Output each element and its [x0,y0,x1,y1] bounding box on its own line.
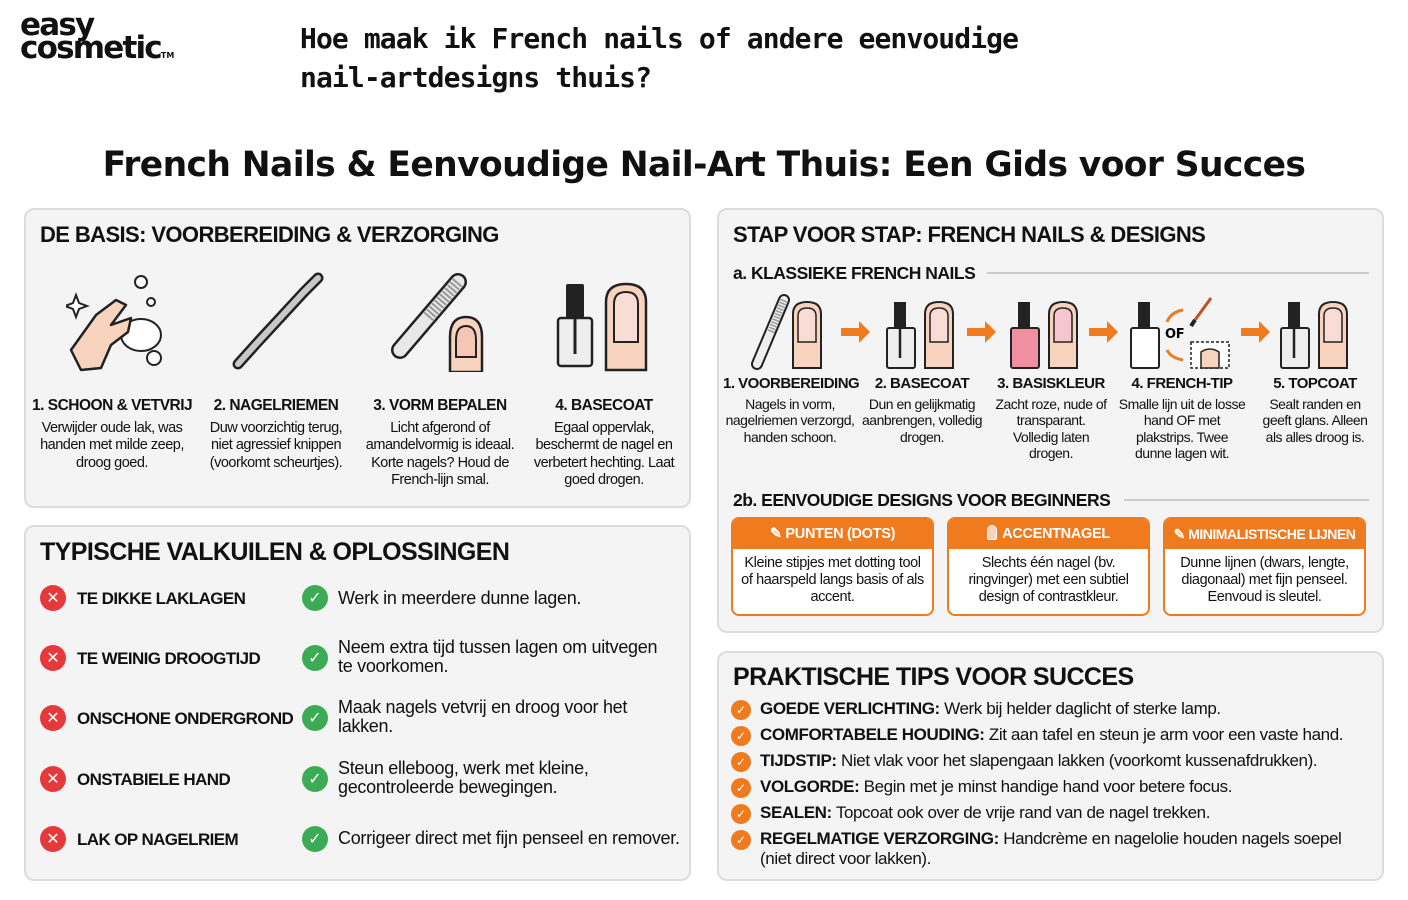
tips list: VOLGORDE: Begin met je minst handige hand voor betere focus. [760,777,1232,796]
french step 1: 1. VOORBEREIDING [723,375,859,392]
step 3: Licht afgerond of amandelvormig is ideaal. Korte nagels? Houd de French-lijn smal. [366,420,514,488]
tip 5 [731,803,1210,824]
pitfall 1: Werk in meerdere dunne lagen. [338,588,581,608]
step 4: 4. BASECOAT [555,397,653,414]
tips list [731,699,1343,868]
tip 4 [731,777,1232,798]
heading: tips: PRAKTISCHE TIPS VOOR SUCCES [733,663,1134,691]
question heading: Hoe maak ik French nails of andere eenvoudige [300,22,1018,55]
pitfall 2: TE WEINIG DROOGTIJD [77,649,260,668]
pitfall 4: Steun elleboog, werk met kleine, [338,758,589,778]
tip 6 [731,829,1341,868]
tips list: COMFORTABELE HOUDING: Zit aan tafel en steun je arm voor een vaste hand. [760,725,1343,744]
main title: French Nails & Eenvoudige Nail-Art Thuis: Een Gids voor Succes [103,145,1305,185]
pitfall 2: ✕ [46,648,60,667]
pitfall 1: ✓ [308,588,322,607]
pitfall 2: te voorkomen. [338,656,448,676]
step 3: 3. VORM BEPALEN [373,397,507,414]
tip 3 [731,751,1317,772]
french step 2: 2. BASECOAT [875,375,969,392]
pitfall 3: ONSCHONE ONDERGROND [77,709,293,728]
pitfall 3: ✕ [46,708,60,727]
french step 1: Nagels in vorm, nagelriemen verzorgd, handen schoon. [726,396,854,444]
panel: stap voor stap [717,208,1384,633]
french step 1 [723,375,859,444]
question heading: nail-artdesigns thuis? [300,61,651,94]
french step 2: Dun en gelijkmatig aanbrengen, volledig drogen. [862,396,982,444]
logo [20,7,174,66]
tip 2 [731,725,1343,746]
french step 5: Sealt randen en geeft glans. Alleen als alles droog is. [1263,396,1367,444]
pitfall 2: ✓ [308,648,322,667]
card: lijnen: ✎ MINIMALISTISCHE LIJNEN [1174,526,1355,542]
card: dots: Kleine stipjes met dotting tool of haarspeld langs basis of als accent. [741,555,924,605]
logo: easy [20,7,93,43]
heading: valkuilen: TYPISCHE VALKUILEN & OPLOSSINGEN [40,538,509,566]
card: accentnagel: Slechts één nagel (bv. ringvinger) met een subtiel design of contrastkleur. [968,555,1129,605]
pitfall 3: lakken. [338,716,393,736]
french step 5: 5. TOPCOAT [1273,375,1357,392]
heading: stap voor stap: STAP VOOR STAP: FRENCH NAILS & DESIGNS [733,222,1205,247]
card: accentnagel: ACCENTNAGEL [1002,526,1110,542]
step 1 [32,397,192,470]
french step 3: 3. BASISKLEUR [997,375,1105,392]
card: lijnen: Dunne lijnen (dwars, lengte, diagonaal) met fijn penseel. Eenvoud is sleutel. [1180,555,1349,605]
pitfall 5: ✓ [308,829,322,848]
pitfall 4 [40,758,589,797]
pitfall 4: ONSTABIELE HAND [77,770,230,789]
tips list: ✓ [736,729,746,743]
pitfall 3 [40,697,628,736]
tips list: ✓ [736,807,746,821]
icon: washing hands [66,275,162,372]
icon: basecoat bottle and nail [556,282,648,372]
pitfall 1: ✕ [46,588,60,607]
card: dots [731,517,934,616]
french steps icons [751,294,1348,370]
tips list: ✓ [736,755,746,769]
pitfall 4: gecontroleerde bewegingen. [338,777,557,797]
french steps icons: OF [1165,327,1184,342]
step 4: Egaal oppervlak, beschermt de nagel en verbetert hechting. Laat goed drogen. [534,420,674,488]
tips list: ✓ [736,833,746,847]
pitfall 2 [40,637,657,676]
french step 4: 4. FRENCH-TIP [1131,375,1232,392]
icon: cuticle pusher [232,272,324,370]
french step 3: Zacht roze, nude of transparant. Volledig laten drogen. [995,396,1107,461]
card: lijnen [1163,517,1366,616]
step 1: Verwijder oude lak, was handen met milde zeep, droog goed. [40,420,184,470]
pitfall 5: ✕ [46,829,60,848]
pitfall 3: Maak nagels vetvrij en droog voor het [338,697,627,717]
question heading [300,22,1018,94]
step 2: 2. NAGELRIEMEN [214,397,338,414]
pitfall 5: LAK OP NAGELRIEM [77,830,238,849]
subheading 2b: 2b. EENVOUDIGE DESIGNS VOOR BEGINNERS [733,490,1110,510]
pitfall 1 [40,585,581,611]
step 2 [210,397,342,470]
heading: basis: DE BASIS: VOORBEREIDING & VERZORGING [40,222,499,247]
tips list: REGELMATIGE VERZORGING: Handcrème en nagelolie houden nagels soepel (niet direct voor lakken). [760,829,1341,868]
pitfall 1: TE DIKKE LAKLAGEN [77,589,245,608]
pitfall 5 [40,826,680,852]
tip 1 [731,699,1221,720]
french step 4: Smalle lijn uit de losse hand OF met plakstrips. Twee dunne lagen wit. [1119,396,1245,461]
logo: cosmeticTM [20,30,174,66]
pitfall 4: ✓ [308,769,322,788]
step 1: 1. SCHOON & VETVRIJ [32,397,192,414]
pitfall 3: ✓ [308,708,322,727]
panel: praktische tips [717,651,1384,881]
pitfall 4: ✕ [46,769,60,788]
tips list: SEALEN: Topcoat ook over de vrije rand van de nagel trekken. [760,803,1210,822]
tips list: ✓ [736,703,746,717]
tips list: ✓ [736,781,746,795]
icon: nail file [391,273,484,372]
tips list: TIJDSTIP: Niet vlak voor het slapengaan lakken (voorkomt kussenafdrukken). [760,751,1317,770]
card: dots: ✎ PUNTEN (DOTS) [770,526,895,542]
card: accentnagel [947,517,1150,616]
pitfall 2: Neem extra tijd tussen lagen om uitvegen [338,637,657,657]
pitfall 5: Corrigeer direct met fijn penseel en remover. [338,828,680,848]
subheading a: a. KLASSIEKE FRENCH NAILS [733,263,975,283]
tips list: GOEDE VERLICHTING: Werk bij helder daglicht of sterke lamp. [760,699,1221,718]
panel: valkuilen [24,525,691,881]
step 2: Duw voorzichtig terug, niet agressief knippen (voorkomt scheurtjes). [210,420,342,470]
panel: basis [24,208,691,508]
